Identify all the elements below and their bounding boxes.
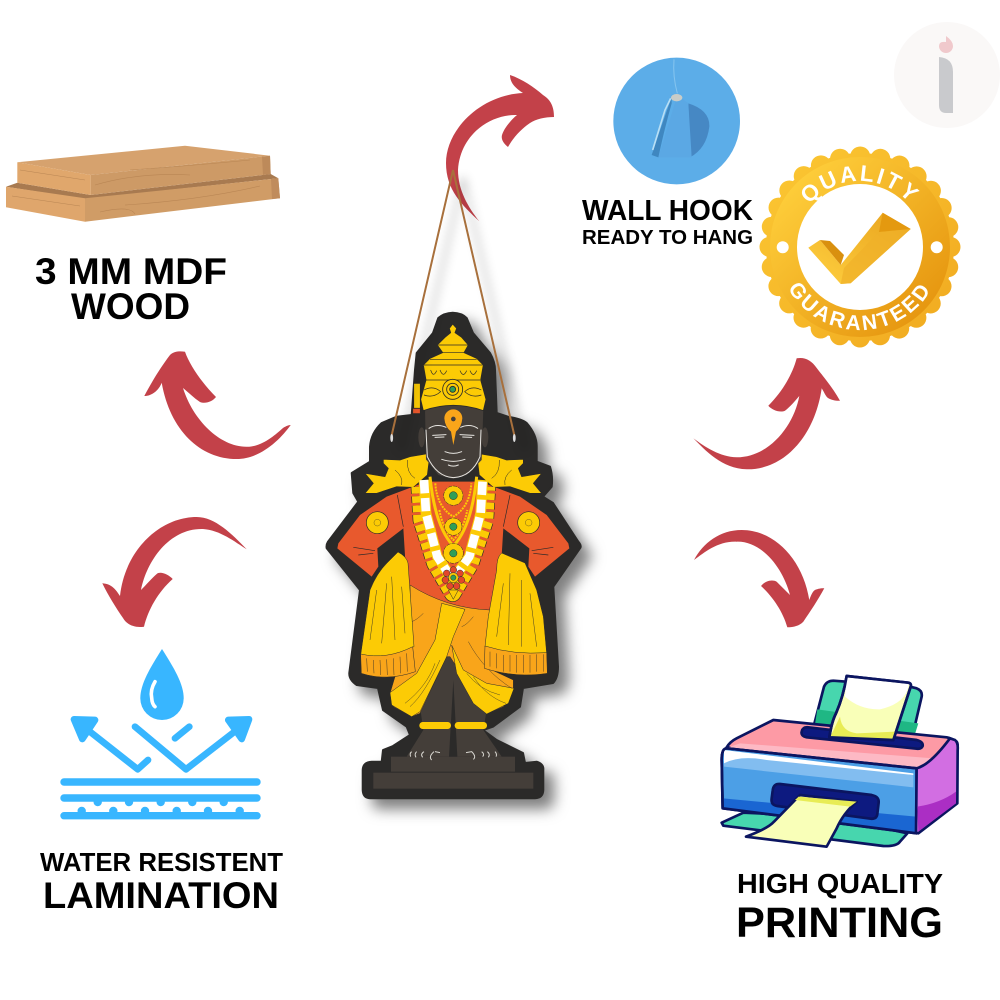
label: 3 mm mdf wood: 3 MM MDF xyxy=(35,251,227,292)
garland xyxy=(419,477,487,593)
label: wall hook: WALL HOOK xyxy=(582,195,753,227)
icon: printer xyxy=(722,676,958,847)
head xyxy=(418,427,425,447)
arrow: to MDF wood xyxy=(144,351,291,459)
product: vitthal wall hanging xyxy=(327,313,581,798)
label: water resistent lamination: LAMINATION xyxy=(43,875,279,916)
necklace medallions xyxy=(442,486,465,599)
label: water resistent lamination: WATER RESISTENT xyxy=(40,849,283,877)
torso and arms xyxy=(337,482,569,610)
label: wall hook xyxy=(582,195,753,249)
label: 3 mm mdf wood: WOOD xyxy=(71,286,190,327)
upper figure: head, torso, garlands xyxy=(337,324,569,610)
label: water resistent lamination xyxy=(40,849,283,916)
dhoti xyxy=(390,585,513,717)
icon: water repellent lamination xyxy=(64,649,257,816)
shoulder cloth right xyxy=(485,553,547,654)
arrow: top to wall hook xyxy=(446,75,554,221)
cloth folds and fringes xyxy=(367,573,543,675)
label: 3 mm mdf wood xyxy=(35,251,227,327)
label: high quality printing: PRINTING xyxy=(736,899,943,947)
watermark logo xyxy=(894,22,1000,128)
arrow: to water resistant lamination xyxy=(102,517,247,627)
lower figure: dhoti, legs, base xyxy=(361,552,547,789)
tilak xyxy=(444,409,462,445)
wood planks icon xyxy=(6,146,280,222)
label: high quality printing: HIGH QUALITY xyxy=(737,868,943,899)
label: high quality printing xyxy=(736,868,943,947)
hanging rope xyxy=(390,170,516,442)
badge: quality guaranteed xyxy=(760,146,960,348)
silhouette backing board xyxy=(327,313,581,798)
facial lines xyxy=(426,426,481,478)
arm medallions xyxy=(366,512,540,534)
anklets xyxy=(419,722,451,729)
label: wall hook: READY TO HANG xyxy=(582,227,753,249)
pedestal xyxy=(391,757,515,772)
fish ornaments xyxy=(365,453,542,493)
icon: wall hook xyxy=(613,58,740,184)
arrow: to quality guaranteed xyxy=(693,358,840,469)
badge: quality guaranteed: GUARANTEED xyxy=(790,283,928,330)
badge: quality guaranteed: QUALITY xyxy=(802,165,920,201)
shoulder cloth left xyxy=(361,552,414,656)
arrow: to high quality printing xyxy=(694,530,824,627)
crown xyxy=(413,324,486,414)
legs xyxy=(407,653,502,757)
